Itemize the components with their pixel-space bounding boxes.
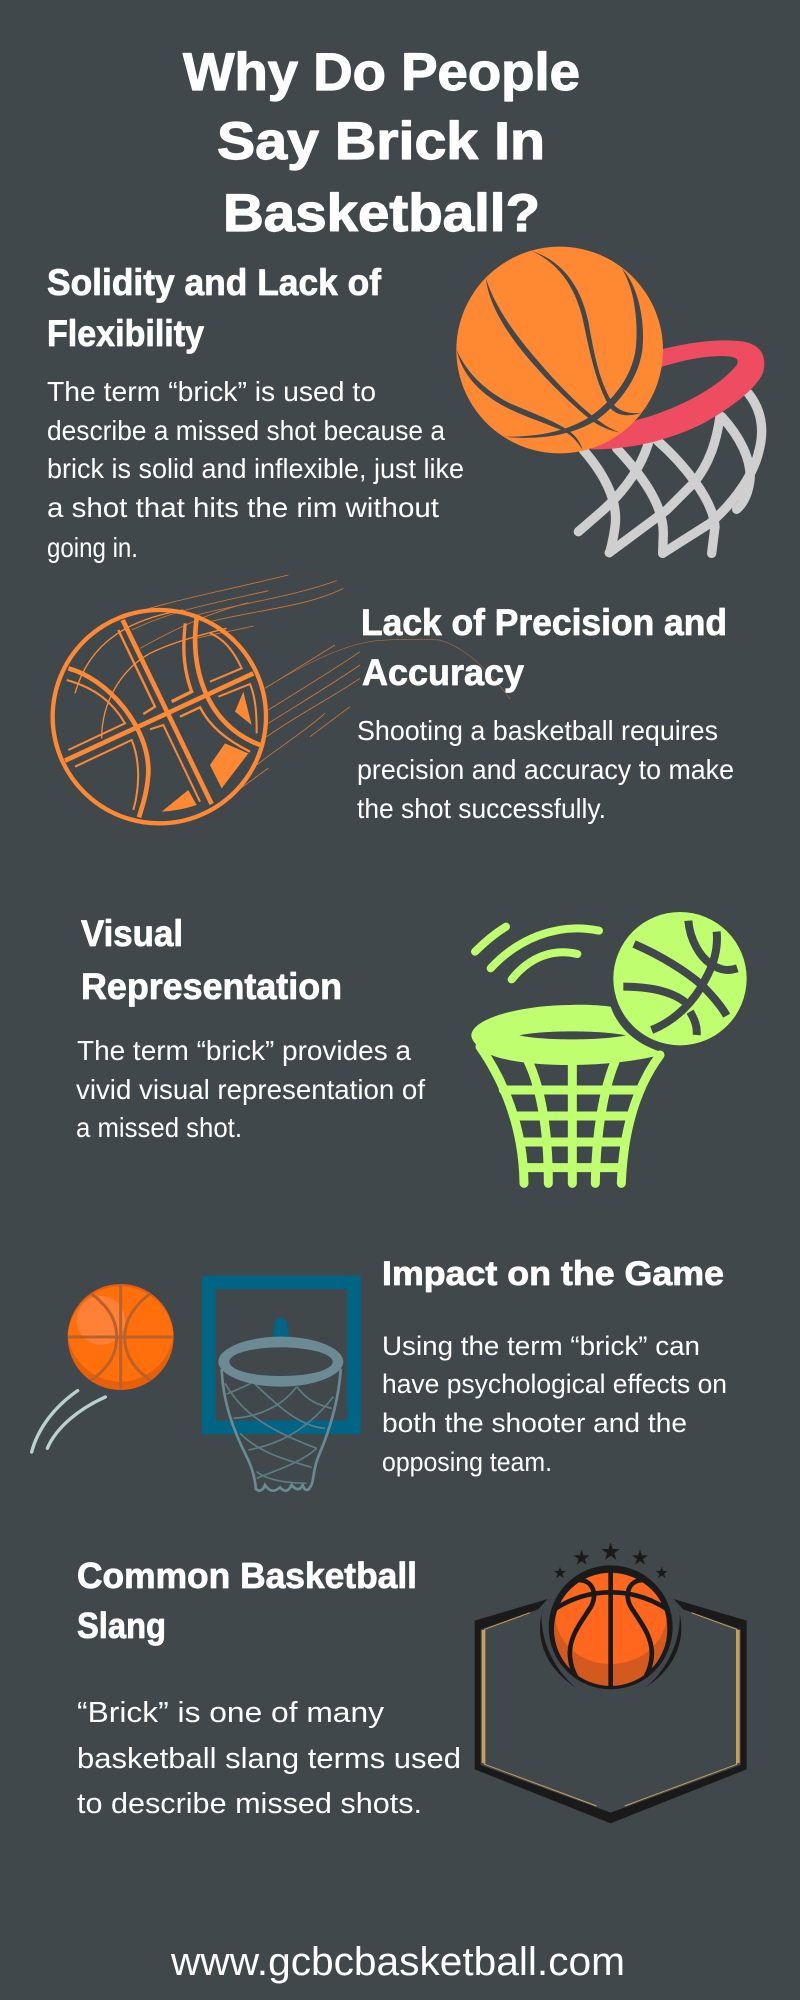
panel: common basketball slang bbox=[77, 1542, 747, 1823]
icon: teal backboard and hoop with net bbox=[209, 1282, 354, 1491]
text block: solidity: a shot that hits the rim without bbox=[47, 492, 439, 523]
ball bbox=[456, 247, 663, 453]
text block: impact bbox=[382, 1331, 727, 1477]
title: Say Brick In bbox=[217, 112, 545, 171]
heading: visual representation: Representation bbox=[81, 966, 342, 1007]
ball bbox=[613, 912, 747, 1045]
inner thin strokes bbox=[67, 610, 257, 810]
rim bbox=[218, 1337, 343, 1387]
panel: lack of precision and accuracy bbox=[53, 575, 734, 824]
title: Basketball? bbox=[223, 184, 540, 243]
heading: impact: Impact on the Game bbox=[382, 1255, 724, 1293]
text block: precision: the shot successfully. bbox=[357, 793, 606, 824]
speed streaks bbox=[120, 575, 510, 788]
badge frame bbox=[475, 1599, 747, 1823]
text block: precision: precision and accuracy to make bbox=[357, 754, 734, 785]
ball outline and seams bbox=[53, 610, 266, 823]
text block: visual representation bbox=[76, 1035, 425, 1143]
text block: solidity: The term “brick” is used to bbox=[47, 376, 376, 407]
text block: slang bbox=[77, 1697, 461, 1820]
text block: slang: basketball slang terms used bbox=[77, 1743, 461, 1775]
heading: slang: Slang bbox=[77, 1605, 166, 1646]
ball bbox=[549, 1565, 673, 1689]
icon: badge with basketball and stars bbox=[475, 1542, 747, 1823]
net bbox=[222, 1370, 341, 1491]
panel: solidity and lack of flexibility bbox=[47, 247, 764, 563]
icon: orange ball with motion lines bbox=[32, 1284, 174, 1452]
net bbox=[480, 1047, 660, 1183]
icon: green ball bouncing on hoop bbox=[471, 912, 747, 1183]
heading: precision: Accuracy bbox=[362, 652, 524, 693]
title bbox=[183, 43, 580, 243]
text block: solidity: brick is solid and inflexible, just like bbox=[47, 453, 464, 484]
heading: solidity: Solidity and Lack of bbox=[47, 262, 382, 303]
heading: solidity: Flexibility bbox=[47, 313, 204, 354]
text block: solidity: describe a missed shot because a bbox=[47, 415, 445, 446]
heading: visual representation: Visual bbox=[81, 913, 183, 954]
heading: precision: Lack of Precision and bbox=[361, 602, 727, 643]
net bbox=[578, 393, 762, 553]
title: Why Do People bbox=[183, 43, 580, 102]
text block: impact: Using the term “brick” can bbox=[382, 1331, 700, 1361]
panel: visual representation bbox=[76, 912, 747, 1183]
text block: precision bbox=[357, 715, 734, 824]
stars bbox=[554, 1542, 668, 1578]
text block: impact: opposing team. bbox=[382, 1447, 552, 1477]
text block: visual representation: The term “brick” provides a bbox=[77, 1035, 411, 1066]
text block: precision: Shooting a basketball requires bbox=[357, 715, 718, 746]
text block: impact: have psychological effects on bbox=[382, 1369, 727, 1399]
heading: solidity bbox=[47, 262, 382, 354]
icon: orange basketball going through pink hoop bbox=[456, 247, 764, 553]
crescents bbox=[540, 1599, 576, 1688]
heading: slang bbox=[77, 1555, 417, 1646]
heading: slang: Common Basketball bbox=[77, 1555, 417, 1596]
text block: slang: “Brick” is one of many bbox=[77, 1697, 385, 1729]
text block: impact: both the shooter and the bbox=[382, 1408, 687, 1438]
heading: visual representation bbox=[81, 913, 342, 1007]
icon: orange outlined basketball with speed streaks bbox=[53, 575, 510, 823]
footer: website: www.gcbcbasketball.com bbox=[170, 1940, 625, 1984]
heading: precision bbox=[361, 602, 727, 693]
text block: solidity bbox=[47, 376, 464, 563]
rim bbox=[471, 1005, 664, 1065]
rim bbox=[590, 340, 764, 449]
text block: visual representation: vivid visual representation of bbox=[76, 1074, 425, 1105]
panel: impact on the game bbox=[32, 1255, 727, 1491]
text block: visual representation: a missed shot. bbox=[76, 1112, 242, 1143]
text block: slang: to describe missed shots. bbox=[77, 1788, 422, 1820]
motion lines bbox=[475, 927, 599, 979]
solid orange highlights bbox=[162, 692, 252, 812]
text block: solidity: going in. bbox=[47, 532, 138, 563]
